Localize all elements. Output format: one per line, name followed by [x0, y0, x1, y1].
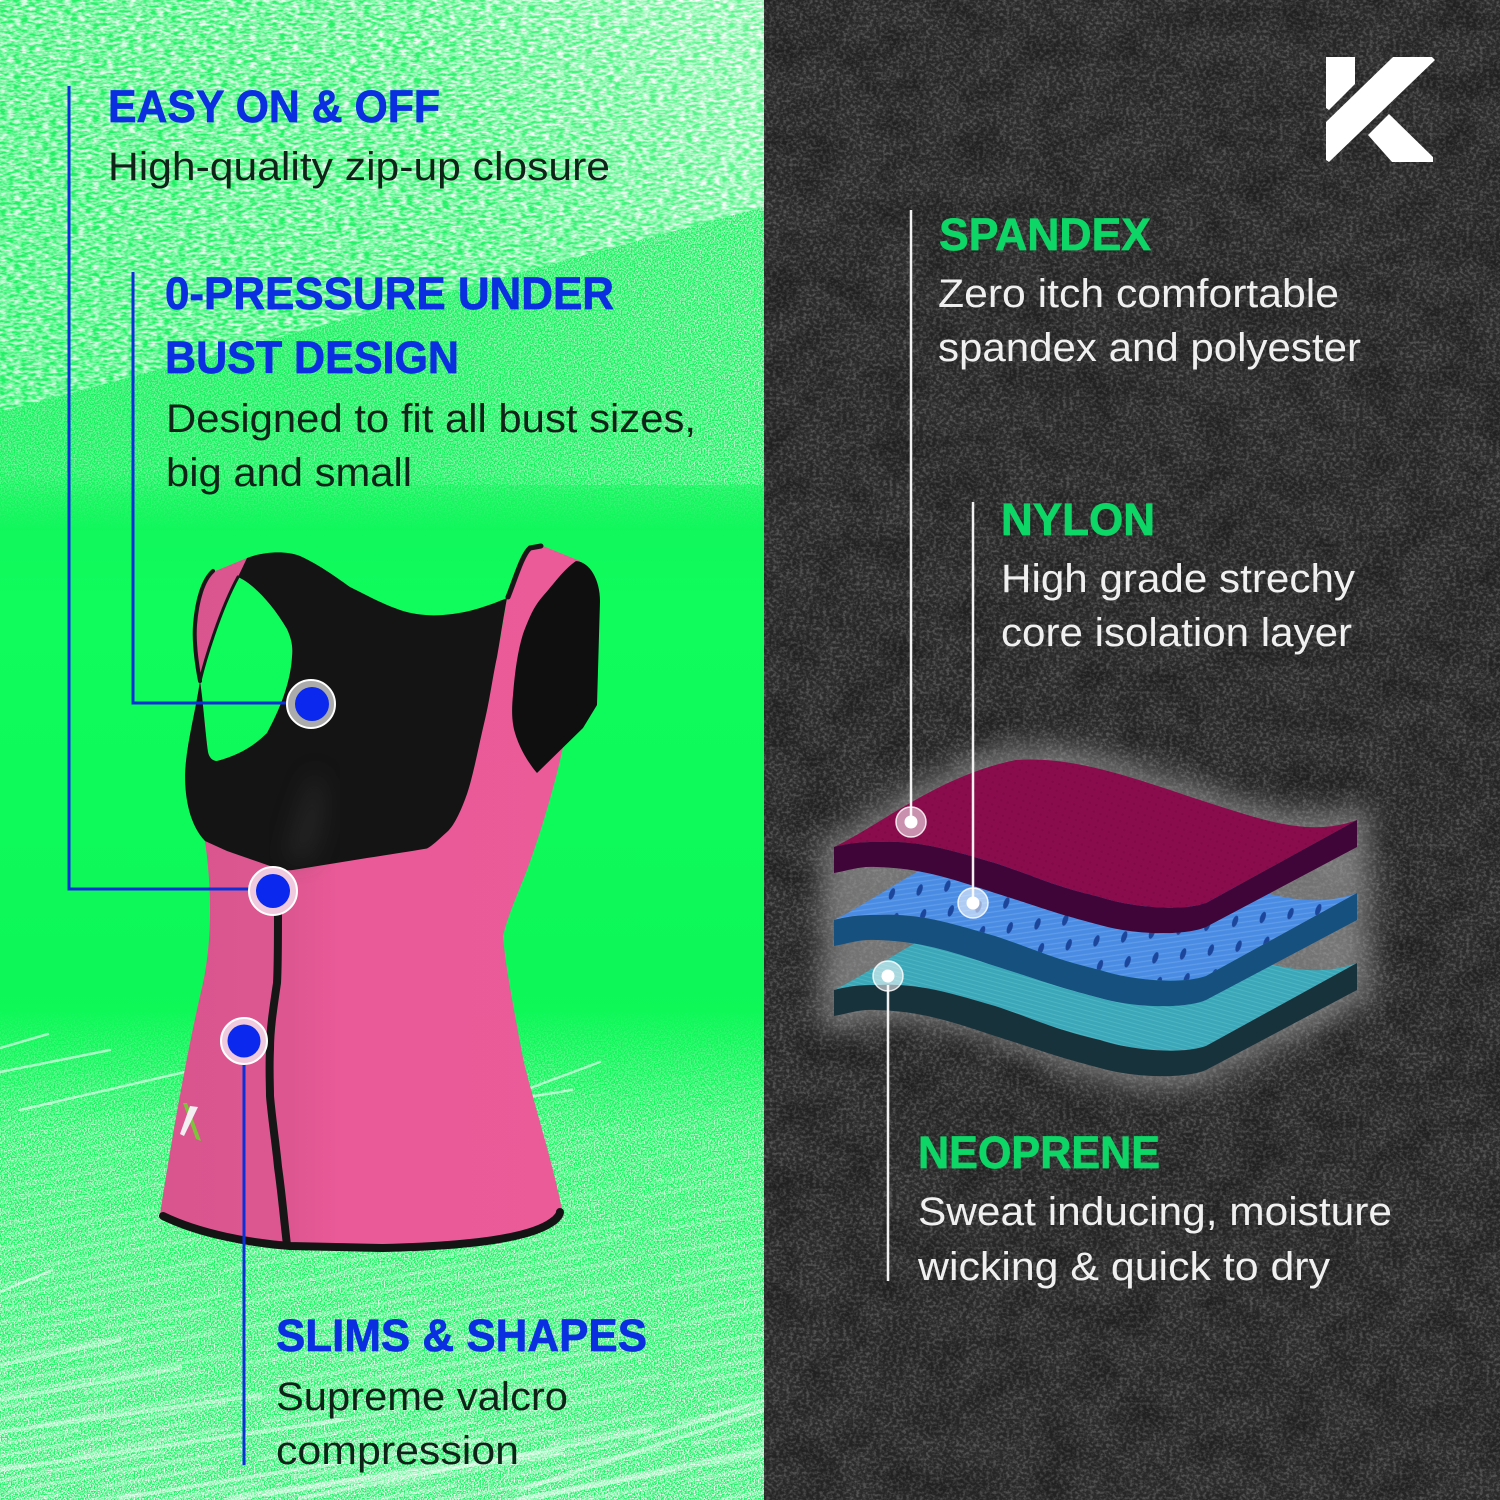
heading: NEOPRENE — [918, 1127, 1160, 1178]
heading: 0-PRESSURE UNDER — [165, 268, 614, 319]
callout: spandex — [896, 209, 1361, 837]
marker dot — [958, 888, 988, 918]
leader line — [133, 272, 292, 703]
black chest panel — [185, 552, 507, 870]
description: Supreme valcro — [276, 1375, 568, 1419]
small K mark on vest — [180, 1103, 201, 1141]
panel: left green background — [0, 0, 764, 1500]
leader line — [887, 985, 889, 1281]
callout: easy on and off — [69, 81, 610, 915]
heading: EASY ON & OFF — [108, 81, 440, 132]
leader line — [69, 86, 252, 889]
callout: slims and shapes — [221, 1018, 647, 1473]
strap trim — [195, 546, 541, 681]
layer: nylon — [834, 833, 1357, 1006]
heading: SPANDEX — [939, 209, 1151, 260]
vest body — [160, 546, 590, 1250]
callout: 0-pressure under bust — [133, 268, 696, 728]
description second line: big and small — [166, 451, 412, 495]
leader line — [242, 1060, 246, 1465]
panel: right dark textured background — [764, 0, 1500, 1500]
description: Zero itch comfortable — [938, 272, 1339, 316]
description second line: core isolation layer — [1001, 611, 1352, 655]
description second line: spandex and polyester — [938, 326, 1361, 370]
leader line — [972, 502, 974, 897]
chest highlight — [285, 770, 324, 860]
layer: spandex — [834, 760, 1357, 933]
heading second line: BUST DESIGN — [165, 332, 459, 383]
marker dot — [896, 807, 926, 837]
leader line — [910, 210, 912, 816]
right armhole lining — [512, 561, 600, 773]
marker dot — [873, 961, 903, 991]
description second line: compression — [276, 1429, 519, 1473]
heading: NYLON — [1001, 494, 1155, 545]
marker dot — [287, 680, 335, 728]
marker dot — [221, 1018, 267, 1064]
callout: nylon — [958, 494, 1355, 918]
hem — [163, 1212, 560, 1248]
heading: SLIMS & SHAPES — [276, 1310, 647, 1361]
description: Designed to fit all bust sizes, — [166, 397, 696, 441]
brand logo — [1326, 57, 1435, 162]
description: Sweat inducing, moisture — [918, 1190, 1392, 1234]
description second line: wicking & quick to dry — [917, 1245, 1330, 1289]
diagram: fabric layers — [822, 747, 1370, 1088]
layer glow — [822, 747, 1370, 1088]
callout: neoprene — [873, 961, 1392, 1289]
product: pink compression vest — [160, 546, 600, 1250]
description: High grade strechy — [1001, 557, 1355, 601]
description: High-quality zip-up closure — [108, 145, 610, 189]
layer: neoprene — [834, 903, 1357, 1076]
marker dot — [249, 867, 297, 915]
front closure — [270, 912, 287, 1245]
